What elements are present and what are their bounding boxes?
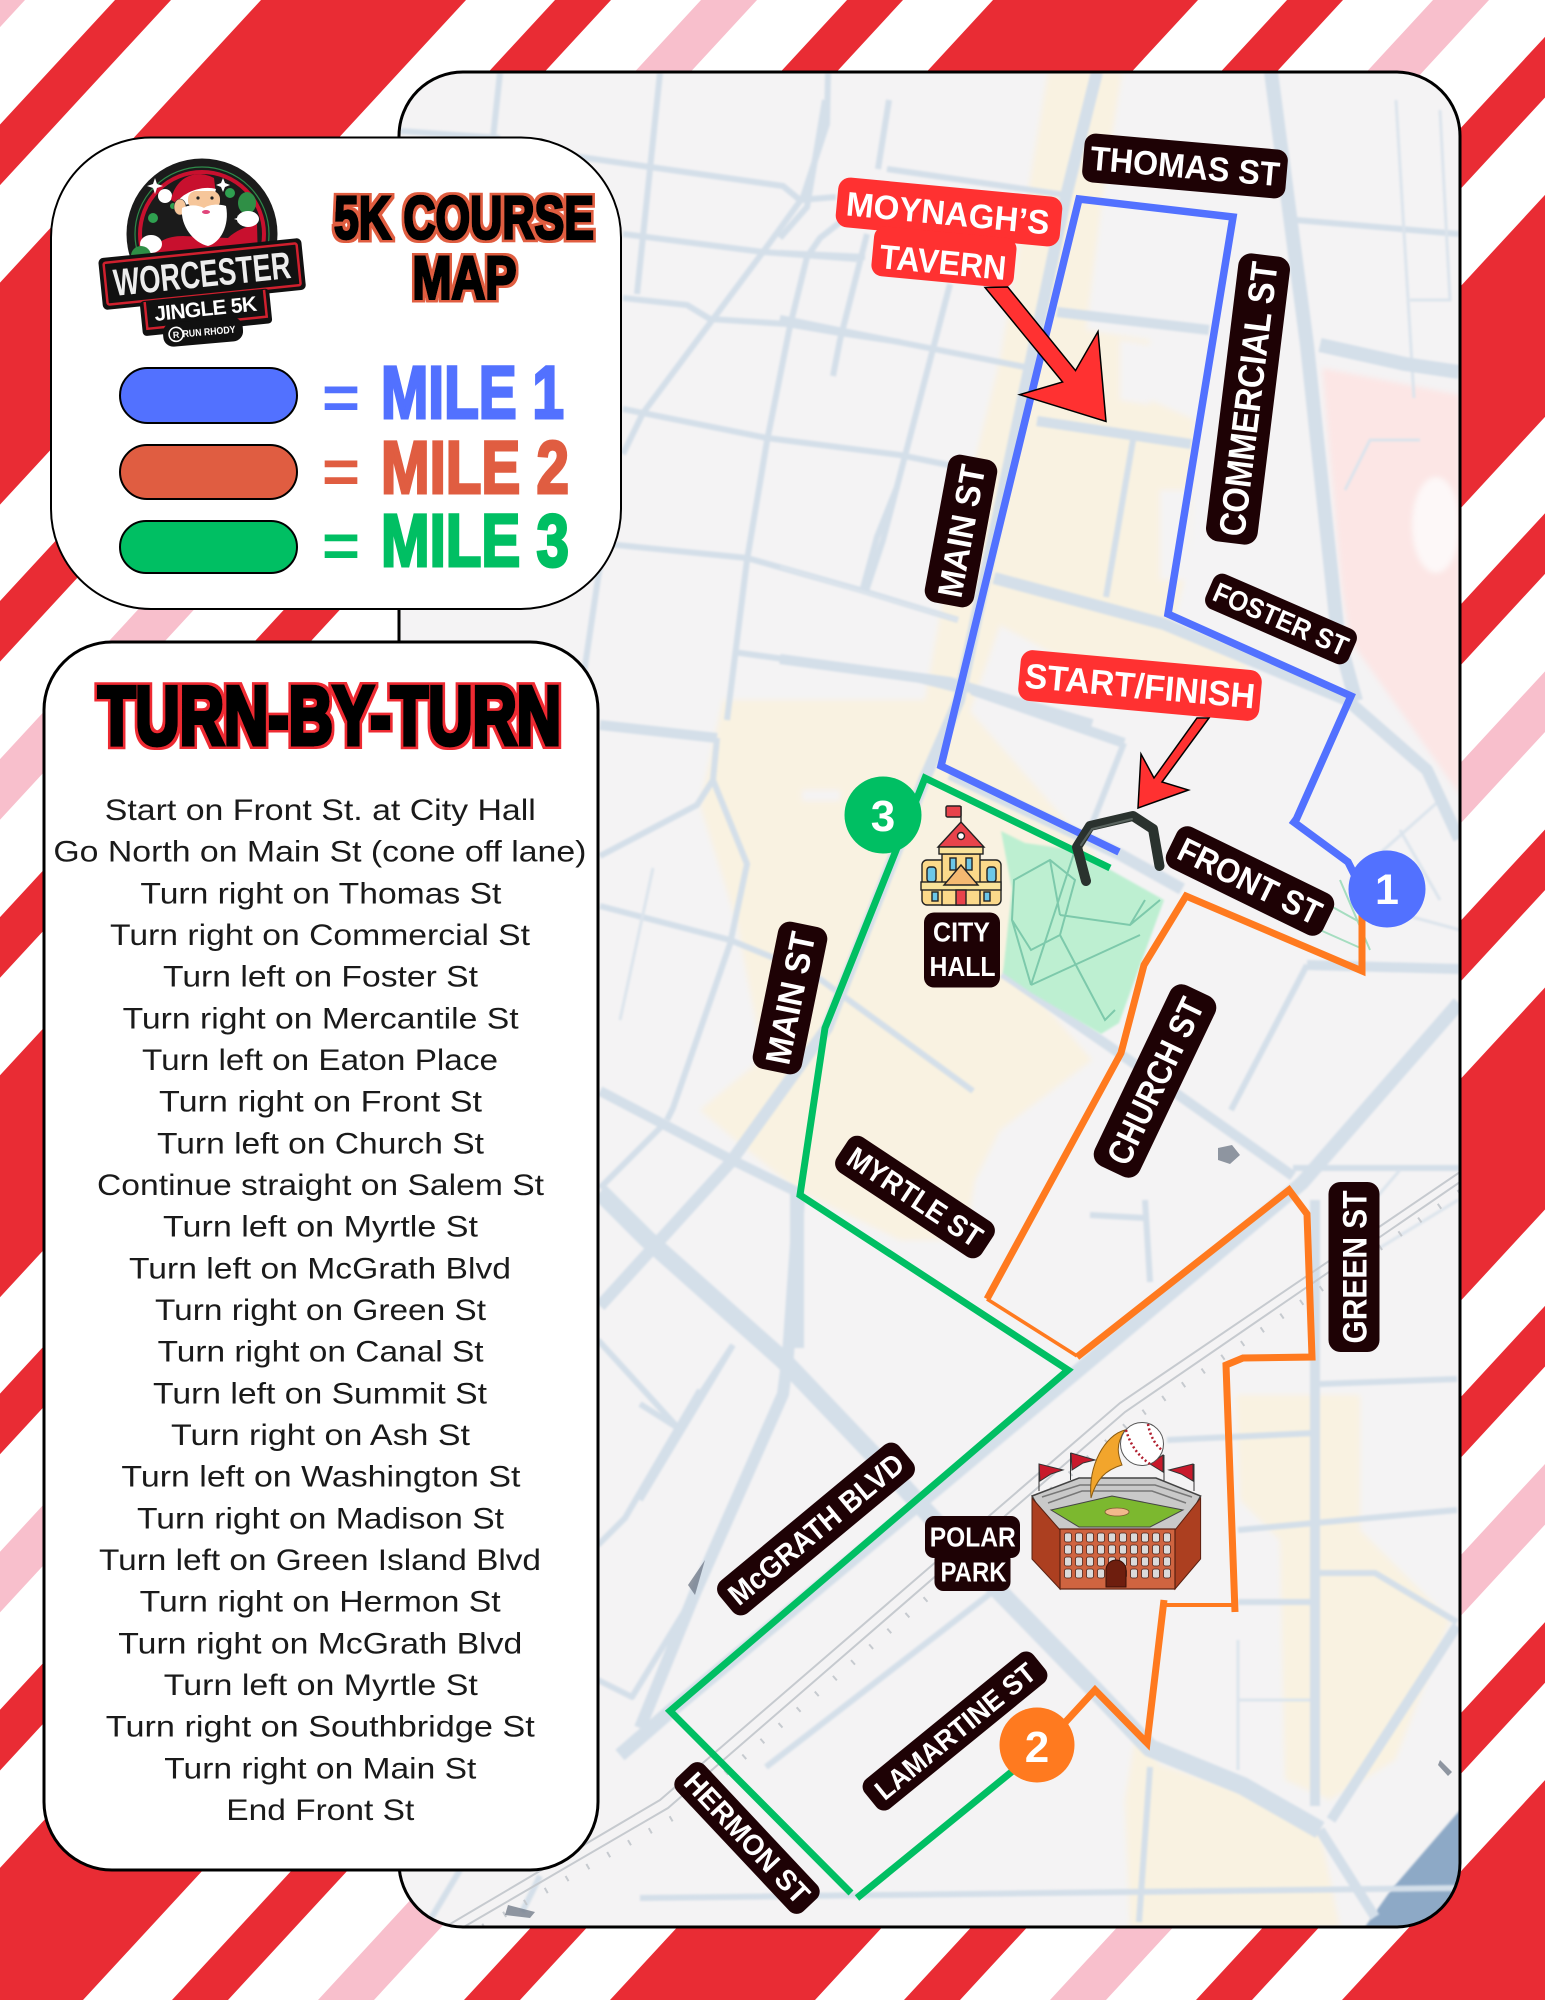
soft white blob in pink area [1412, 477, 1460, 573]
callout: Moynagh's Tavern: MOYNAGH’S [844, 185, 1051, 242]
text block: directions list: Turn right on Front St [159, 1086, 483, 1119]
text block: directions list: Turn right on Madison St [137, 1502, 505, 1535]
marker: mile 2 [1000, 1708, 1074, 1782]
label: Polar Park: PARK [940, 1556, 1006, 1588]
text block: directions list: Turn left on Summit St [153, 1377, 488, 1410]
text block: directions list: Turn right on Mercantile St [123, 1002, 519, 1035]
marker: mile 3: 3 [871, 792, 895, 841]
text block: directions list: Turn right on Southbridge St [106, 1711, 536, 1744]
label: Polar Park [925, 1516, 1020, 1591]
street label: Main St lower: MAIN ST [759, 929, 823, 1068]
title: 5K Course Map: 5K COURSE [334, 184, 594, 252]
text block: directions list: End Front St [226, 1794, 415, 1827]
legend row: mile 2: = [322, 438, 360, 507]
water corner [1365, 1810, 1460, 1927]
street label: Thomas St: THOMAS ST [1089, 140, 1281, 194]
map land use areas [700, 72, 1460, 1927]
text block: directions list: Turn left on Washington St [121, 1461, 521, 1494]
railway lines [440, 1172, 1460, 1940]
street label: Commercial St: COMMERCIAL ST [1211, 259, 1286, 539]
marker: mile 3 [844, 776, 922, 854]
text block: directions list: Turn right on Canal St [158, 1336, 484, 1369]
street label: Green St: GREEN ST [1336, 1190, 1374, 1344]
text block: directions list: Continue straight on Salem St [97, 1169, 545, 1202]
street label: Foster St: FOSTER ST [1209, 577, 1353, 662]
marker: mile 1 [1348, 850, 1426, 928]
label: City Hall: HALL [930, 951, 996, 982]
text block: directions list: Turn left on McGrath Blvd [129, 1252, 511, 1285]
logo: Worcester Jingle 5K: R [172, 330, 180, 340]
text block: directions list: Turn left on Foster St [163, 961, 479, 994]
street label: Myrtle St: MYRTLE ST [841, 1141, 988, 1254]
marker: mile 2: 2 [1025, 1723, 1049, 1772]
street label: Green St [1328, 1182, 1380, 1352]
text block: directions list: Turn right on Green St [155, 1294, 487, 1327]
legend row: mile 1 [120, 351, 564, 434]
legend row: mile 1: MILE 1 [381, 351, 564, 434]
street label: Hermon St: HERMON ST [677, 1766, 816, 1911]
callout: Start/Finish: START/FINISH [1023, 657, 1257, 716]
marker: mile 1: 1 [1375, 866, 1399, 914]
logo: Worcester Jingle 5K [98, 158, 309, 347]
text block: directions list: Turn left on Myrtle St [163, 1211, 479, 1244]
street label: Church St: CHURCH ST [1100, 992, 1212, 1171]
logo: Worcester Jingle 5K: JINGLE 5K [153, 293, 258, 326]
street label: McGrath Blvd: McGRATH BLVD [722, 1447, 911, 1612]
street label: Main St upper: MAIN ST [931, 462, 993, 601]
legend row: mile 3: MILE 3 [381, 499, 569, 582]
legend row: mile 3: = [322, 512, 360, 581]
text block: directions list: Turn left on Eaton Place [142, 1044, 498, 1077]
park [1001, 831, 1370, 1034]
route: mile 3 (green) [670, 778, 1110, 1898]
small map marks [505, 1145, 1452, 1918]
label: City Hall [924, 912, 1000, 988]
route: mile 1 (blue) [941, 199, 1362, 890]
legend row: mile 1: = [322, 364, 360, 433]
text block: directions list: Turn left on Church St [157, 1127, 485, 1160]
text block: directions list: Turn right on Hermon St [140, 1586, 501, 1619]
street label: Lamartine St: LAMARTINE ST [869, 1657, 1042, 1806]
arrow: to start finish arch [1138, 718, 1209, 808]
icon: start finish arch [1077, 816, 1160, 881]
logo: Worcester Jingle 5K: RUN RHODY [182, 325, 236, 340]
text block: directions list: Turn right on Main St [164, 1752, 477, 1785]
text block: directions list: Turn left on Green Island Blvd [99, 1544, 541, 1577]
callout: Moynagh's Tavern: TAVERN [878, 238, 1008, 288]
arrow: to Moynagh's Tavern [985, 287, 1106, 422]
label: Polar Park: POLAR [930, 1522, 1016, 1552]
panel: turn-by-turn directions [44, 642, 598, 1870]
text block: directions list [53, 794, 586, 1827]
icon: Polar Park stadium [1032, 1422, 1201, 1589]
heading: Turn-by-Turn: TURN-BY-TURN [98, 669, 561, 762]
title: 5K Course Map: MAP [412, 244, 516, 312]
panel: legend [51, 138, 621, 609]
text block: directions list: Turn right on McGrath Blvd [118, 1627, 522, 1660]
logo: Worcester Jingle 5K: WORCESTER [112, 245, 293, 305]
text block: directions list: Go North on Main St (cone off lane) [53, 836, 586, 869]
title: 5K Course Map [334, 184, 594, 312]
callout: Moynagh's Tavern [835, 177, 1063, 289]
text block: directions list: Turn left on Myrtle St [164, 1669, 479, 1702]
legend row: mile 3 [120, 499, 569, 582]
roads [400, 72, 1460, 1922]
text block: directions list: Turn right on Ash St [171, 1419, 471, 1452]
panel: street map [399, 72, 1460, 1940]
route: mile 2 (orange) [987, 896, 1362, 1743]
label: City Hall: CITY [933, 916, 990, 948]
text block: directions list: Start on Front St. at City Hall [105, 794, 536, 827]
legend row: mile 2: MILE 2 [381, 426, 569, 509]
text block: directions list: Turn right on Thomas St [140, 877, 502, 910]
street label: Front St: FRONT ST [1172, 831, 1328, 933]
legend row: mile 2 [120, 426, 569, 509]
icon: city hall [921, 806, 1001, 905]
text block: directions list: Turn right on Commercial St [110, 919, 531, 952]
